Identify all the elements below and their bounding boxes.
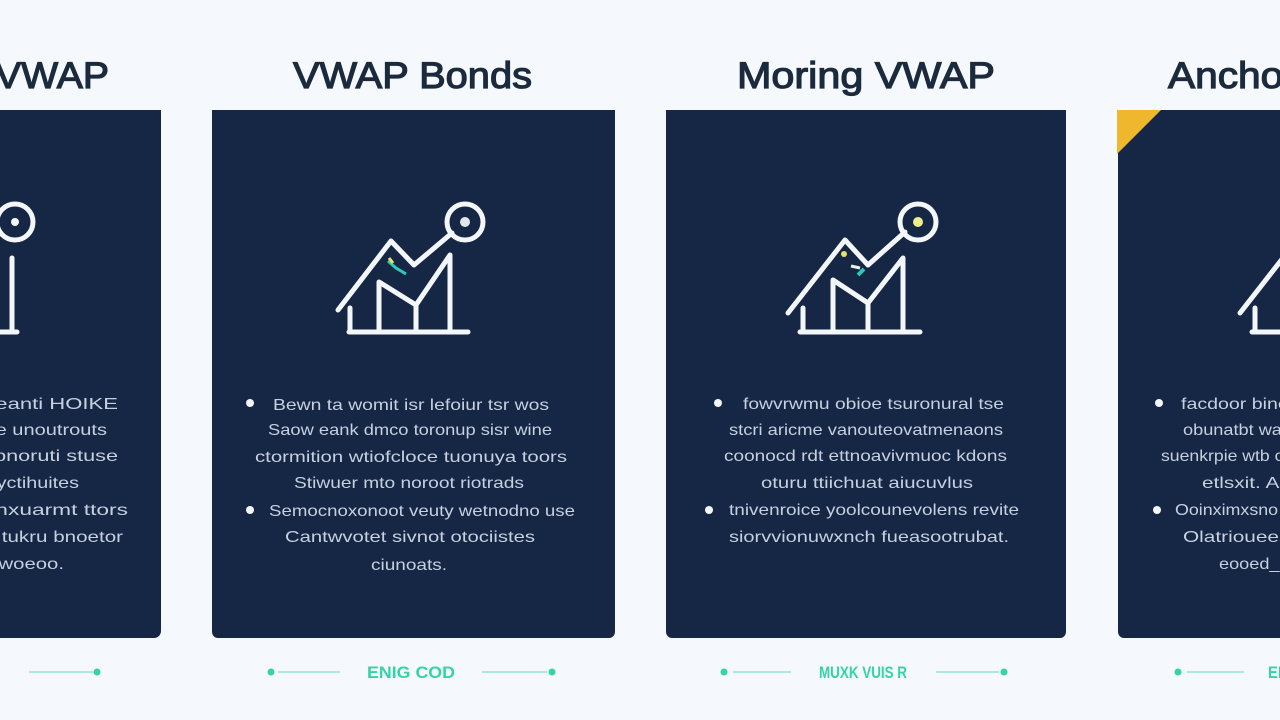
footer label: MUXK VUIS R: MUXK VUIS R <box>819 663 907 682</box>
footer connector <box>29 668 100 676</box>
bullet list: ctormition wtiofcloce tuonuya toors <box>255 449 567 466</box>
card background <box>666 110 1066 638</box>
panel: VWAP Bonds <box>212 55 615 682</box>
heading: VWAP Bonds: VWAP Bonds <box>293 55 532 96</box>
footer label: MUXK VUIS R <box>720 663 1008 682</box>
corner accent <box>1117 110 1161 154</box>
footer label: ENIG COD <box>268 663 556 682</box>
bullet list: fowvrwmu obioe tsuronural tse <box>743 396 1004 413</box>
bullet list: Bewn ta womit isr lefoiur tsr wos <box>273 397 549 414</box>
footer label: ENIG COD: ENIG COD <box>367 663 455 682</box>
bullet text <box>0 396 128 573</box>
icon: chart with target <box>338 204 483 332</box>
card background <box>212 110 615 638</box>
panel: Anchored VWAP (cropped) <box>1117 55 1280 682</box>
bullet list: siorvvionuwxnch fueasootrubat. <box>729 529 1009 546</box>
icon: chart with target (cropped) <box>0 204 33 332</box>
bullet list: Semocnoxonoot veuty wetnodno use <box>269 503 575 520</box>
bullet list <box>705 396 1019 546</box>
icon: chart with target <box>788 204 936 332</box>
bullet list: Stiwuer mto noroot riotrads <box>294 475 524 492</box>
bullet list: tnivenroice yoolcounevolens revite <box>729 502 1019 519</box>
icon: chart with target (cropped) <box>1240 240 1280 332</box>
heading: Moring VWAP: Moring VWAP <box>737 55 995 96</box>
bullet list <box>1153 396 1280 573</box>
bullet list: Saow eank dmco toronup sisr wine <box>268 422 552 439</box>
card background <box>1118 110 1280 638</box>
bullet list: oturu ttiichuat aiucuvlus <box>761 475 973 492</box>
bullet list: ciunoats. <box>371 557 447 574</box>
bullet list: stcri aricme vanouteovatmenaons <box>729 422 1003 439</box>
bullet list: Cantwvotet sivnot otociistes <box>285 529 535 546</box>
footer connector <box>1174 663 1280 682</box>
bullet list <box>246 397 575 574</box>
card background <box>0 110 161 638</box>
bullet list: coonocd rdt ettnoavivmuoc kdons <box>724 448 1007 465</box>
panel: left column (cropped) <box>0 55 161 676</box>
panel: Moving VWAP <box>666 55 1066 682</box>
